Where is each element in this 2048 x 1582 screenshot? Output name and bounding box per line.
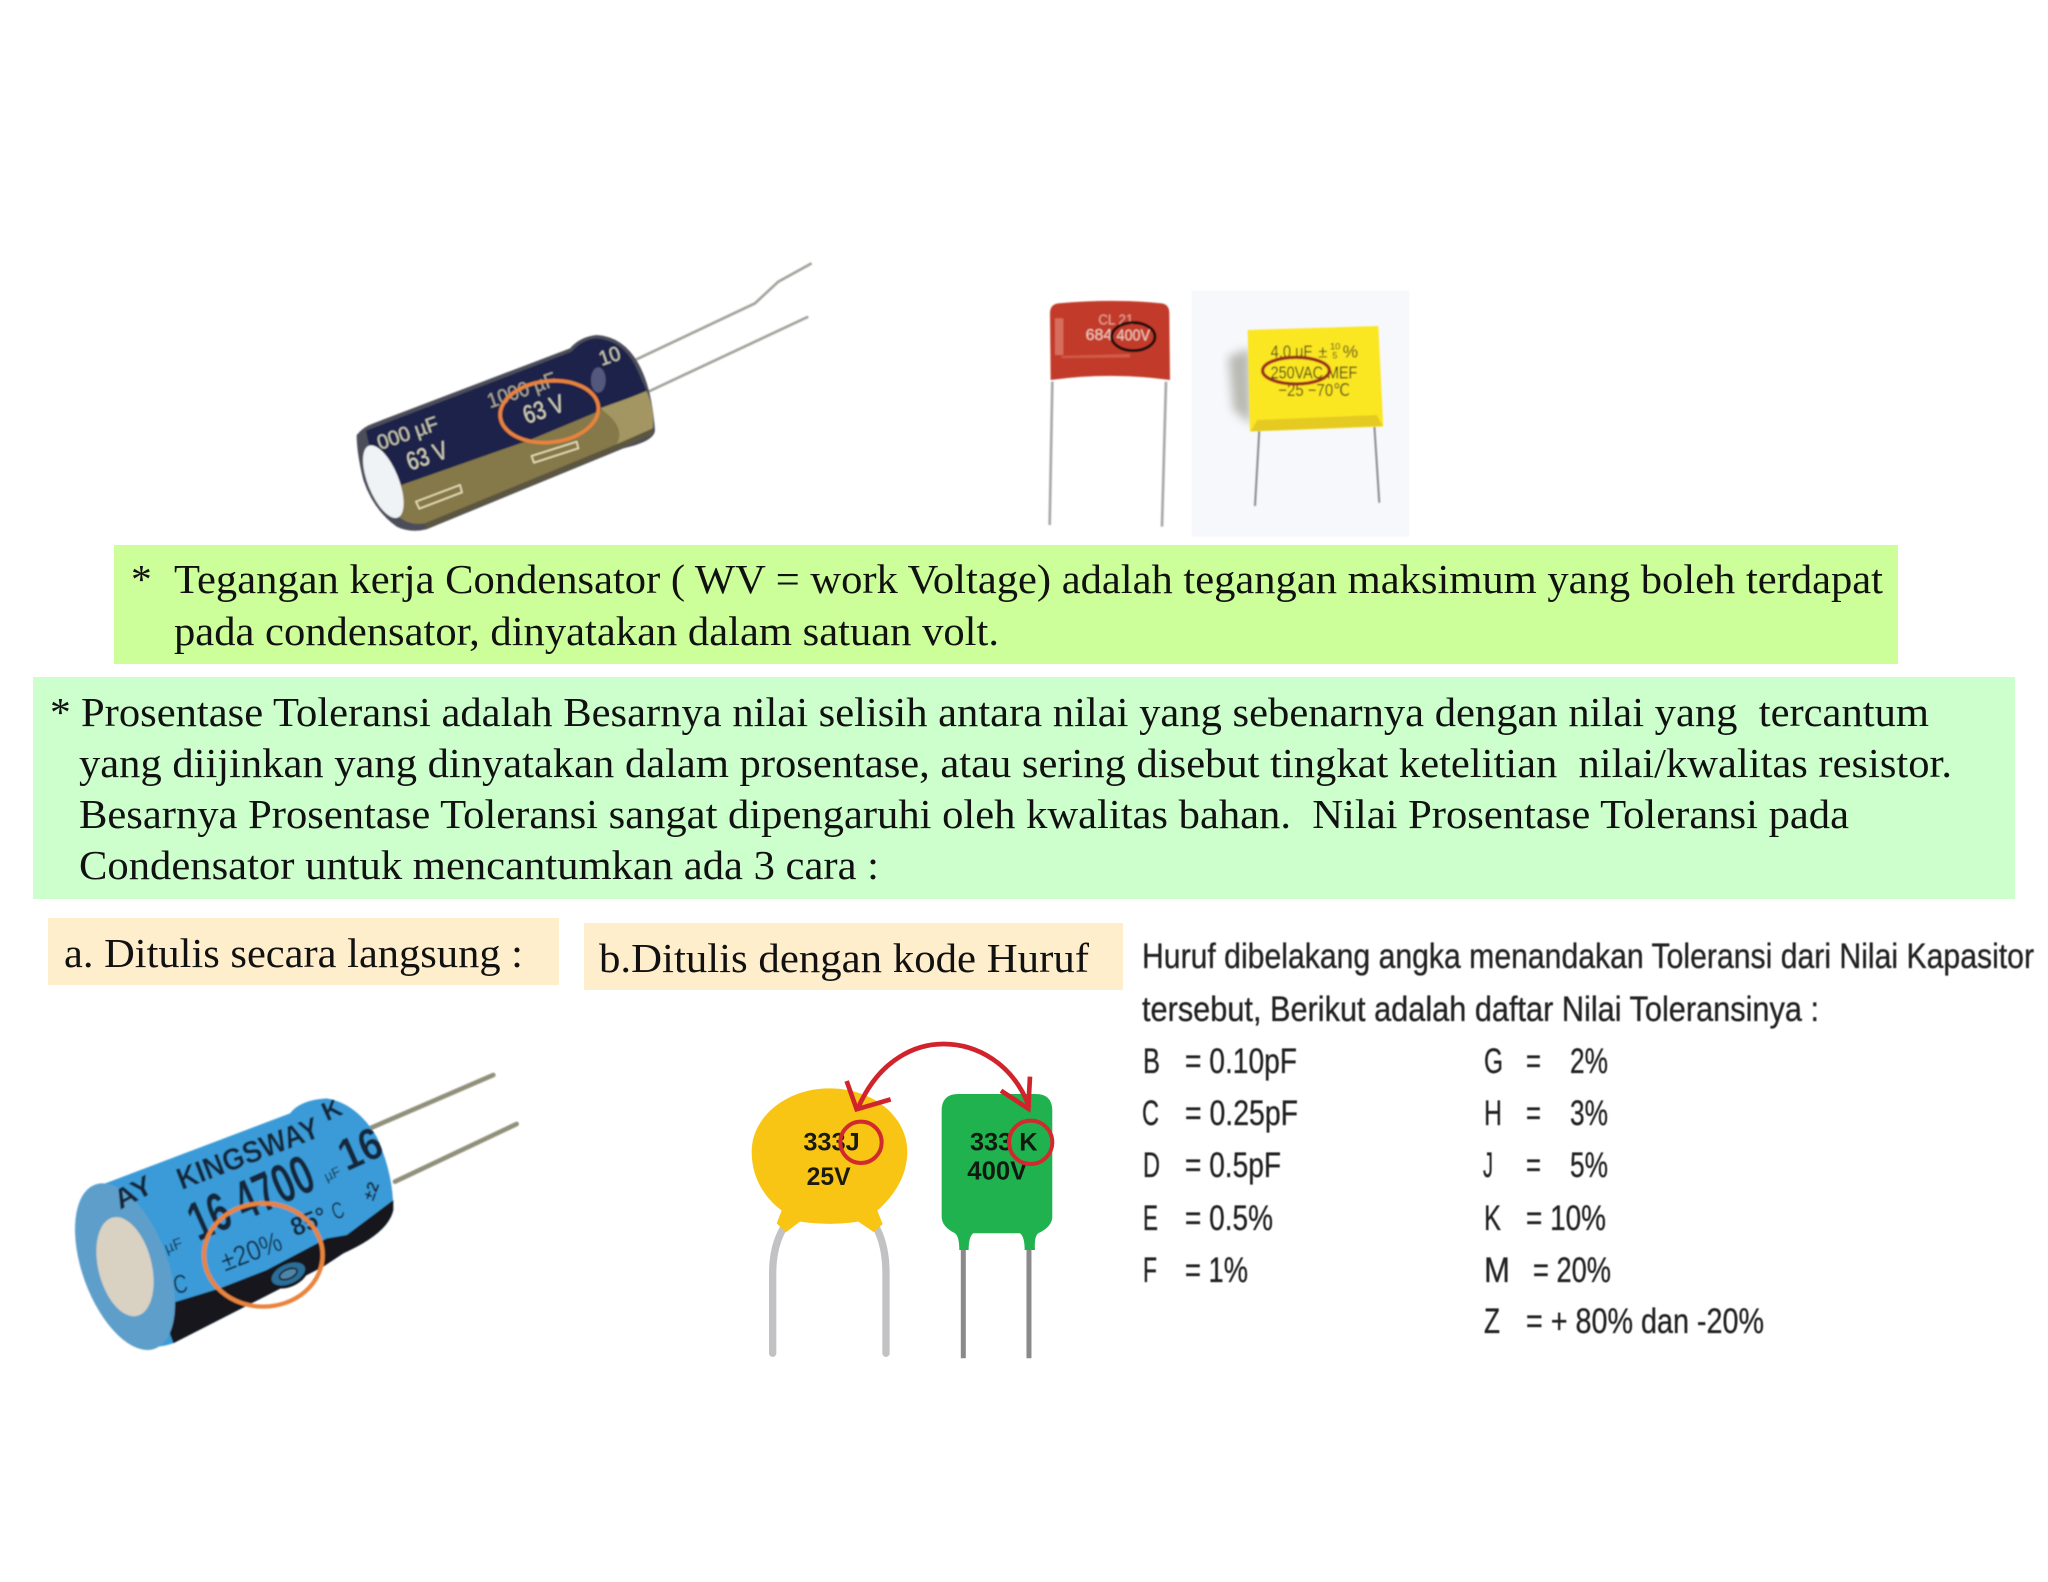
photo: red film capacitor 400V <box>1050 301 1170 527</box>
list: left column codes: = 0.25pF <box>1185 1094 1298 1133</box>
photo: blue capacitor 20 percent tolerance: µF <box>321 1163 343 1184</box>
photo: electrolytic capacitor 63V: 1000 µF <box>484 368 559 413</box>
list: left column codes: = 0.5% <box>1185 1199 1273 1238</box>
photo: blue capacitor 20 percent tolerance: ±2 <box>359 1179 383 1203</box>
list: right column codes: = 10% <box>1526 1199 1606 1238</box>
photo: electrolytic capacitor 63V: 10 <box>596 342 624 371</box>
list: left column codes: B <box>1143 1042 1160 1081</box>
diagram: capacitor tolerance letter codes <box>752 1044 1052 1358</box>
photo: blue capacitor 20 percent tolerance: AY <box>108 1169 158 1215</box>
panel: tegangan kerja definition <box>114 545 1898 664</box>
text block: tolerance code list <box>1142 937 2034 1341</box>
list: left column codes <box>1142 1042 1298 1290</box>
photo: yellow film capacitor 250VAC: −25 −70℃ <box>1278 380 1350 400</box>
photo: red film capacitor 400V: 684 <box>1086 327 1113 344</box>
photo: blue capacitor 20 percent tolerance: KINGSWAY <box>172 1111 324 1197</box>
panel: heading a <box>48 918 559 985</box>
list: right column codes: G <box>1484 1042 1503 1081</box>
list: left column codes: E <box>1143 1199 1158 1238</box>
list: right column codes: 2% <box>1570 1042 1608 1081</box>
list: right column codes: = + 80% dan -20% <box>1526 1302 1764 1341</box>
list: right column codes: 5% <box>1570 1146 1608 1185</box>
photo: yellow film capacitor 250VAC: 4.0 uF <box>1271 341 1312 361</box>
photo: yellow film capacitor 250VAC: 10 <box>1330 341 1340 351</box>
icon: yellow ceramic capacitor 333J: 333J <box>803 1129 860 1157</box>
list: right column codes: H <box>1484 1094 1502 1133</box>
arrow: double headed red curve <box>847 1044 1030 1109</box>
photo: yellow film capacitor 250VAC: 250VAC MEF <box>1271 362 1357 382</box>
icon: yellow ceramic capacitor 333J: 25V <box>807 1164 851 1191</box>
photo: blue capacitor 20 percent tolerance: 16 <box>330 1117 390 1181</box>
photo: blue capacitor 20 percent tolerance: µF <box>162 1235 185 1257</box>
list: left column codes: C <box>1142 1094 1159 1133</box>
photo: blue capacitor 20 percent tolerance: 85° <box>286 1201 331 1242</box>
photo: blue capacitor 20 percent tolerance: ±20% <box>216 1226 286 1277</box>
text: intro: tersebut, Berikut adalah daftar Nilai Toleransinya : <box>1142 990 1819 1029</box>
list: right column codes: M <box>1484 1251 1510 1290</box>
photo: red film capacitor 400V: CL 21 <box>1098 312 1133 328</box>
photo: yellow film capacitor 250VAC: % <box>1343 341 1358 361</box>
photo: red film capacitor 400V: 400V <box>1117 328 1151 345</box>
icon: green film capacitor 333K: 400V <box>967 1155 1028 1185</box>
photo: electrolytic capacitor 63V: 63 V <box>519 390 568 430</box>
panel: heading a: a. Ditulis secara langsung : <box>64 930 523 976</box>
list: right column codes: = 20% <box>1533 1251 1611 1290</box>
icon: yellow ceramic capacitor 333J <box>752 1088 907 1353</box>
photo: blue capacitor 20 percent tolerance: C <box>171 1268 190 1300</box>
list: right column codes: = <box>1526 1042 1541 1081</box>
list: right column codes: K <box>1484 1199 1501 1238</box>
list: left column codes: F <box>1143 1251 1157 1290</box>
photo: electrolytic capacitor 63V: 63 V <box>403 436 451 476</box>
photo: yellow film capacitor 250VAC <box>1192 291 1409 537</box>
text: prosentase toleransi: yang diijinkan yang dinyatakan dalam prosentase, atau sering disebut tingkat ketelitian nilai/kwalitas resistor. <box>79 740 1952 786</box>
text: prosentase toleransi: Condensator untuk mencantumkan ada 3 cara : <box>79 842 879 888</box>
text: prosentase toleransi: * <box>50 689 71 735</box>
icon: green film capacitor 333K: 333 K <box>970 1129 1038 1157</box>
text: tegangan kerja: * <box>131 556 152 602</box>
list: left column codes: D <box>1143 1146 1160 1185</box>
icon: red circles on letter codes <box>840 1121 1052 1164</box>
photo: blue capacitor 20 percent tolerance: 16 4700 <box>178 1142 323 1253</box>
panel: heading b: b.Ditulis dengan kode Huruf <box>599 935 1089 981</box>
text: tegangan kerja: Tegangan kerja Condensator ( WV = work Voltage) adalah tegangan maksimum yang boleh terdapat <box>174 556 1883 603</box>
photo: blue capacitor 20 percent tolerance: C <box>328 1196 348 1225</box>
list: right column codes: J <box>1483 1146 1493 1185</box>
photo: electrolytic capacitor 63V <box>355 263 812 531</box>
list: right column codes: 3% <box>1570 1094 1608 1133</box>
panel: heading b <box>584 923 1123 990</box>
list: right column codes: Z <box>1484 1302 1500 1341</box>
photo: blue capacitor 20 percent tolerance: K <box>317 1092 347 1127</box>
list: right column codes: = <box>1526 1094 1541 1133</box>
text: tegangan kerja <box>131 556 1883 654</box>
photo: blue capacitor 20 percent tolerance <box>55 1075 517 1363</box>
list: right column codes: = <box>1526 1146 1541 1185</box>
text: intro <box>1142 937 2034 1029</box>
list: right column codes <box>1483 1042 1764 1341</box>
panel: prosentase toleransi definition <box>33 677 2015 899</box>
text: tegangan kerja: pada condensator, dinyatakan dalam satuan volt. <box>174 608 999 654</box>
list: left column codes: = 0.5pF <box>1185 1146 1281 1185</box>
photo: yellow film capacitor 250VAC: 5 <box>1332 350 1338 360</box>
icon: green film capacitor 333K <box>942 1094 1052 1358</box>
photo: electrolytic capacitor 63V: 000 µF <box>374 412 441 455</box>
text: prosentase toleransi: Besarnya Prosentase Toleransi sangat dipengaruhi oleh kwalitas bahan. Nilai Prosentase Toleransi pada <box>79 791 1849 837</box>
list: left column codes: = 1% <box>1185 1251 1248 1290</box>
list: left column codes: = 0.10pF <box>1185 1042 1297 1081</box>
text: prosentase toleransi <box>50 689 1952 888</box>
photo: yellow film capacitor 250VAC: ± <box>1318 342 1327 361</box>
text: prosentase toleransi: Prosentase Toleransi adalah Besarnya nilai selisih antara nilai yang sebenarnya dengan nilai yang tercantum <box>81 689 1929 735</box>
